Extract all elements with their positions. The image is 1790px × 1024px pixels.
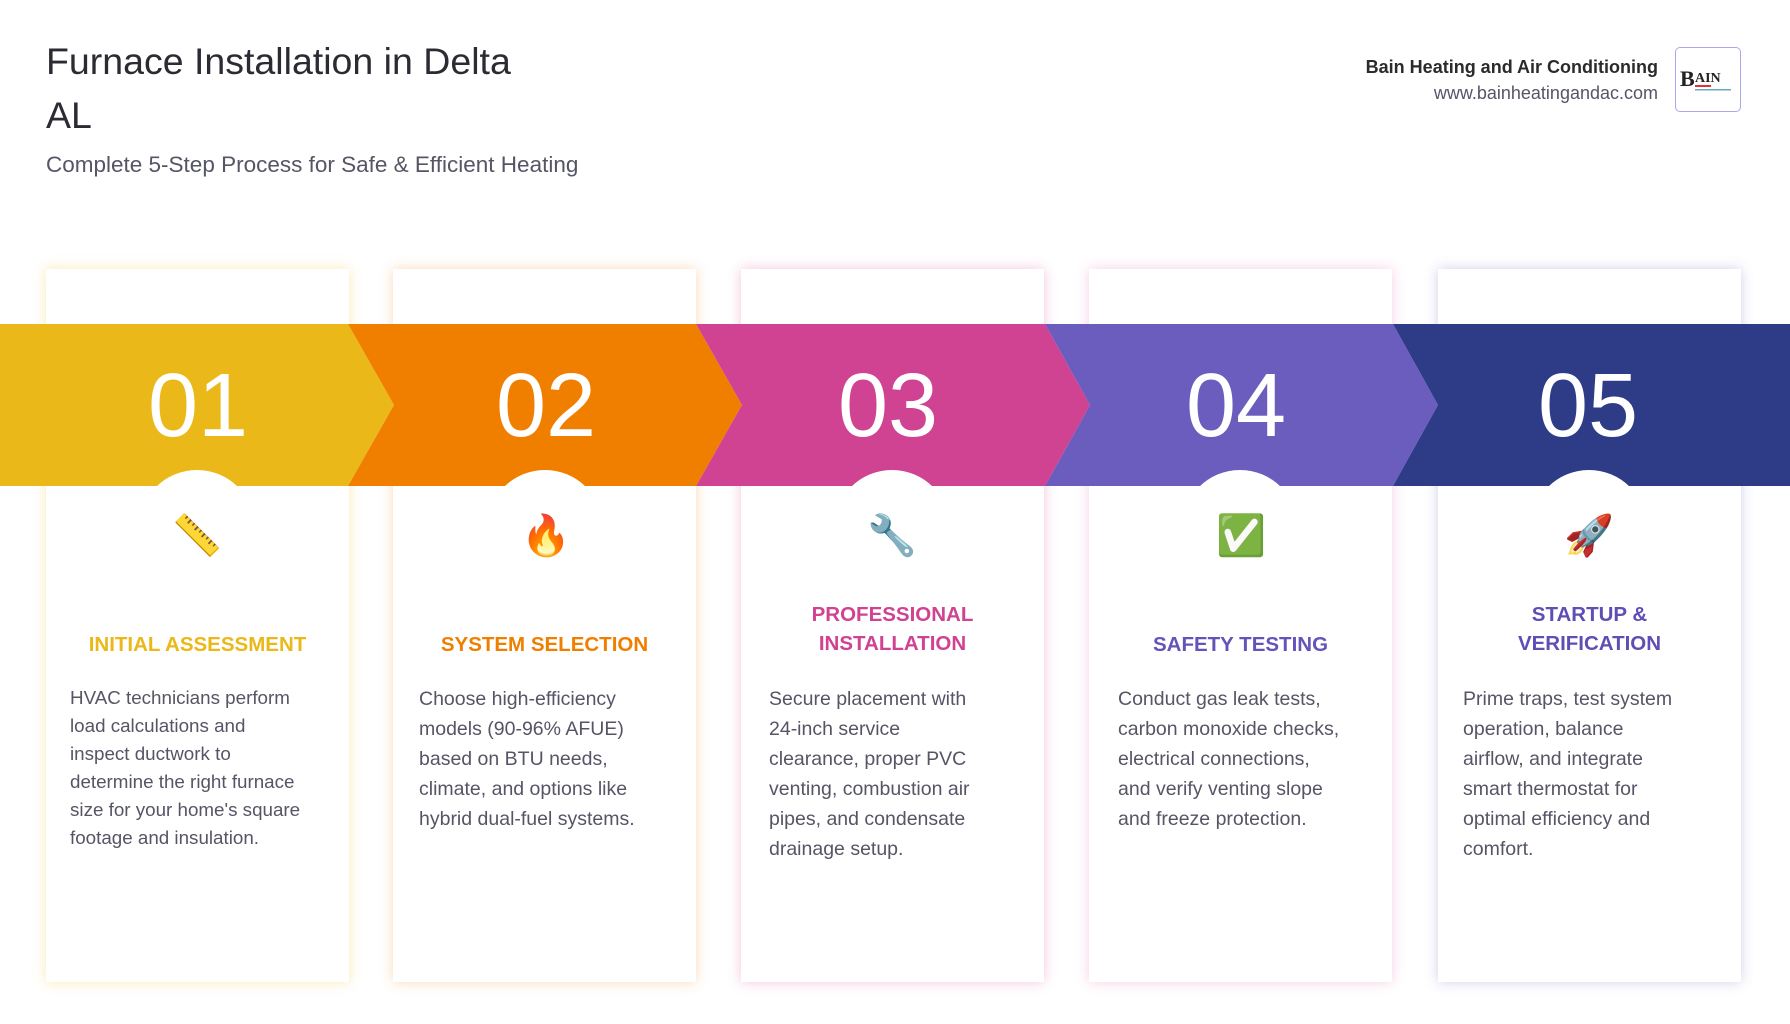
- body 2: Choose high-efficiency: [419, 688, 616, 710]
- body 1: inspect ductwork to: [70, 743, 231, 764]
- number 05: 05: [1538, 356, 1638, 456]
- title: AL: [46, 94, 92, 136]
- heading 1: INITIAL ASSESSMENT: [89, 633, 306, 656]
- body 4: and freeze protection.: [1118, 808, 1307, 830]
- body 3: pipes, and condensate: [769, 808, 965, 830]
- body 1: size for your home's square: [70, 799, 300, 820]
- heading 5: [1518, 603, 1661, 655]
- brand text: www.bainheatingandac.com: [1434, 83, 1658, 103]
- body 2: hybrid dual-fuel systems.: [419, 808, 635, 830]
- subtitle: Complete 5-Step Process for Safe & Efficient Heating: [46, 152, 578, 177]
- heading 2: SYSTEM SELECTION: [441, 633, 648, 656]
- number 02: 02: [496, 356, 596, 456]
- brand text: Bain Heating and Air Conditioning: [1366, 57, 1658, 77]
- body 4: carbon monoxide checks,: [1118, 718, 1339, 740]
- body 3: venting, combustion air: [769, 778, 970, 800]
- body 5: optimal efficiency and: [1463, 808, 1650, 830]
- body 5: comfort.: [1463, 838, 1533, 860]
- icon: fire: 🔥: [521, 514, 571, 558]
- heading 3: [812, 603, 973, 655]
- body 1: determine the right furnace: [70, 771, 294, 792]
- heading 3: PROFESSIONAL: [812, 603, 973, 626]
- icon: wrench: 🔧: [867, 514, 917, 558]
- number 04: 04: [1186, 356, 1286, 456]
- body 2: climate, and options like: [419, 778, 627, 800]
- body 3: drainage setup.: [769, 838, 903, 860]
- body 5: smart thermostat for: [1463, 778, 1637, 800]
- body 1: HVAC technicians perform: [70, 687, 290, 708]
- heading 5: STARTUP &: [1532, 603, 1647, 626]
- body 5: operation, balance: [1463, 718, 1623, 740]
- brand text: [1366, 57, 1658, 103]
- body 4: electrical connections,: [1118, 748, 1310, 770]
- logo: AIN: [1695, 71, 1721, 86]
- body 4: [1118, 688, 1339, 830]
- body 1: [70, 687, 300, 848]
- body 5: Prime traps, test system: [1463, 688, 1672, 710]
- body 3: [769, 688, 970, 860]
- card 3: [741, 269, 1044, 982]
- number 01: 01: [148, 356, 248, 456]
- body 2: models (90-96% AFUE): [419, 718, 624, 740]
- number 03: 03: [838, 356, 938, 456]
- logo: [1675, 47, 1741, 112]
- body 1: load calculations and: [70, 715, 245, 736]
- heading 3: INSTALLATION: [819, 632, 966, 655]
- icon: check: ✅: [1216, 514, 1266, 558]
- body 3: 24-inch service: [769, 718, 900, 740]
- body 5: [1463, 688, 1672, 860]
- title: [46, 40, 511, 136]
- heading 4: SAFETY TESTING: [1153, 633, 1328, 656]
- body 3: Secure placement with: [769, 688, 966, 710]
- logo: B: [1680, 66, 1695, 91]
- body 3: clearance, proper PVC: [769, 748, 966, 770]
- body 2: [419, 688, 635, 830]
- body 4: and verify venting slope: [1118, 778, 1323, 800]
- body 1: footage and insulation.: [70, 827, 259, 848]
- card 5: [1438, 269, 1741, 982]
- heading 5: VERIFICATION: [1518, 632, 1661, 655]
- card 1: [46, 269, 349, 982]
- body 2: based on BTU needs,: [419, 748, 608, 770]
- card 4: [1089, 269, 1392, 982]
- body 4: Conduct gas leak tests,: [1118, 688, 1321, 710]
- icon: ruler: 📏: [172, 514, 222, 558]
- title: Furnace Installation in Delta: [46, 40, 511, 82]
- icon: rocket: 🚀: [1564, 514, 1614, 558]
- body 5: airflow, and integrate: [1463, 748, 1643, 770]
- card 2: [393, 269, 696, 982]
